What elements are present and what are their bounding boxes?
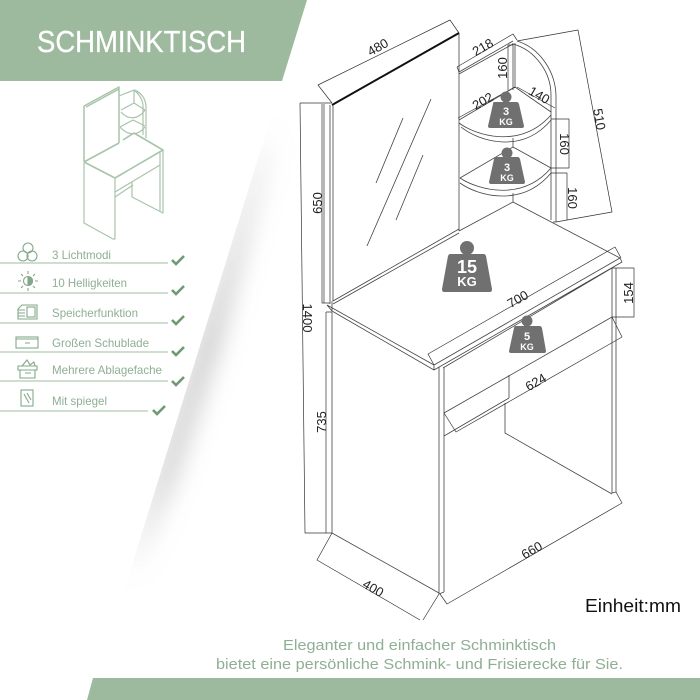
feature row: 3 Lichtmodi — [0, 243, 184, 264]
dimension label: 650: 650 — [310, 192, 325, 214]
arched shelf unit — [459, 41, 556, 222]
weight icon: 3 KG lower shelf: 3 — [504, 162, 510, 174]
weight icon: 5 KG drawer: 5 — [524, 331, 530, 343]
dimension label: 400: 400 — [360, 576, 386, 600]
dimension label: 160 middle: 160 — [557, 133, 572, 155]
dimension label: 480: 480 — [365, 35, 391, 59]
weight icon: 3 KG upper shelf: KG — [499, 117, 513, 127]
feature row: Mit spiegel: Mit spiegel — [52, 395, 107, 408]
dimension lines — [300, 20, 634, 620]
desk body and legs — [332, 268, 616, 594]
feature row: 3 Lichtmodi: 3 Lichtmodi — [52, 249, 111, 262]
bottom caption — [216, 637, 623, 673]
weight icon: 3 KG lower shelf: KG — [500, 173, 514, 183]
weight icon: 5 KG drawer: KG — [520, 342, 534, 352]
feature row: Speicherfunktion: Speicherfunktion — [52, 307, 138, 320]
bottom caption: bietet eine persönliche Schmink- und Frisierecke für Sie. — [216, 656, 623, 673]
dimension label: 160 upper: 160 — [495, 57, 510, 79]
weight icon: 15 KG desk top: KG — [457, 274, 477, 289]
dimension label: 154: 154 — [621, 282, 636, 304]
dimension label: 660: 660 — [519, 538, 545, 562]
dimension label: 624: 624 — [523, 370, 549, 394]
weight icon: 5 KG drawer — [509, 316, 546, 353]
furniture line drawing: dressing table — [300, 20, 634, 620]
feature row: Speicherfunktion — [0, 305, 184, 324]
top heading banner — [0, 0, 307, 81]
dimension label: 160 lower: 160 — [565, 187, 580, 209]
weight icon: 15 KG desk top: 15 — [457, 257, 477, 277]
dimension label: 510: 510 — [590, 107, 609, 131]
feature row: 10 Helligkeiten — [0, 271, 184, 294]
icon: small dressing table — [84, 87, 163, 239]
unit label: Einheit:mm — [585, 596, 681, 616]
weight icon: 3 KG upper shelf — [488, 92, 524, 128]
feature row: Mehrere Ablagefache: Mehrere Ablagefache — [52, 364, 162, 377]
dimension label: 140: 140 — [526, 83, 552, 107]
mirror panel — [330, 33, 459, 304]
weight icon: 3 KG lower shelf — [489, 148, 525, 184]
weight icon: 3 KG upper shelf: 3 — [503, 106, 509, 118]
feature row: Mit spiegel — [0, 390, 165, 414]
bottom caption: Eleganter und einfacher Schminktisch — [283, 637, 556, 654]
feature row: Mehrere Ablagefache — [0, 360, 184, 385]
title: SCHMINKTISCH — [37, 24, 246, 59]
dimension label: 700: 700 — [505, 287, 531, 311]
dimension label: 218: 218 — [470, 35, 496, 59]
feature row: 10 Helligkeiten: 10 Helligkeiten — [52, 277, 127, 290]
dimension label: 735: 735 — [314, 411, 329, 433]
dimension label: 202: 202 — [470, 89, 496, 113]
feature row: Großen Schublade: Großen Schublade — [52, 337, 149, 350]
dimension label: 1400: 1400 — [300, 304, 315, 332]
diagonal panel shadow — [140, 169, 266, 544]
bottom green bar — [87, 678, 700, 700]
feature row: Großen Schublade — [0, 337, 184, 355]
desk top — [327, 202, 622, 370]
weight icon: 15 KG desk top — [442, 241, 492, 292]
